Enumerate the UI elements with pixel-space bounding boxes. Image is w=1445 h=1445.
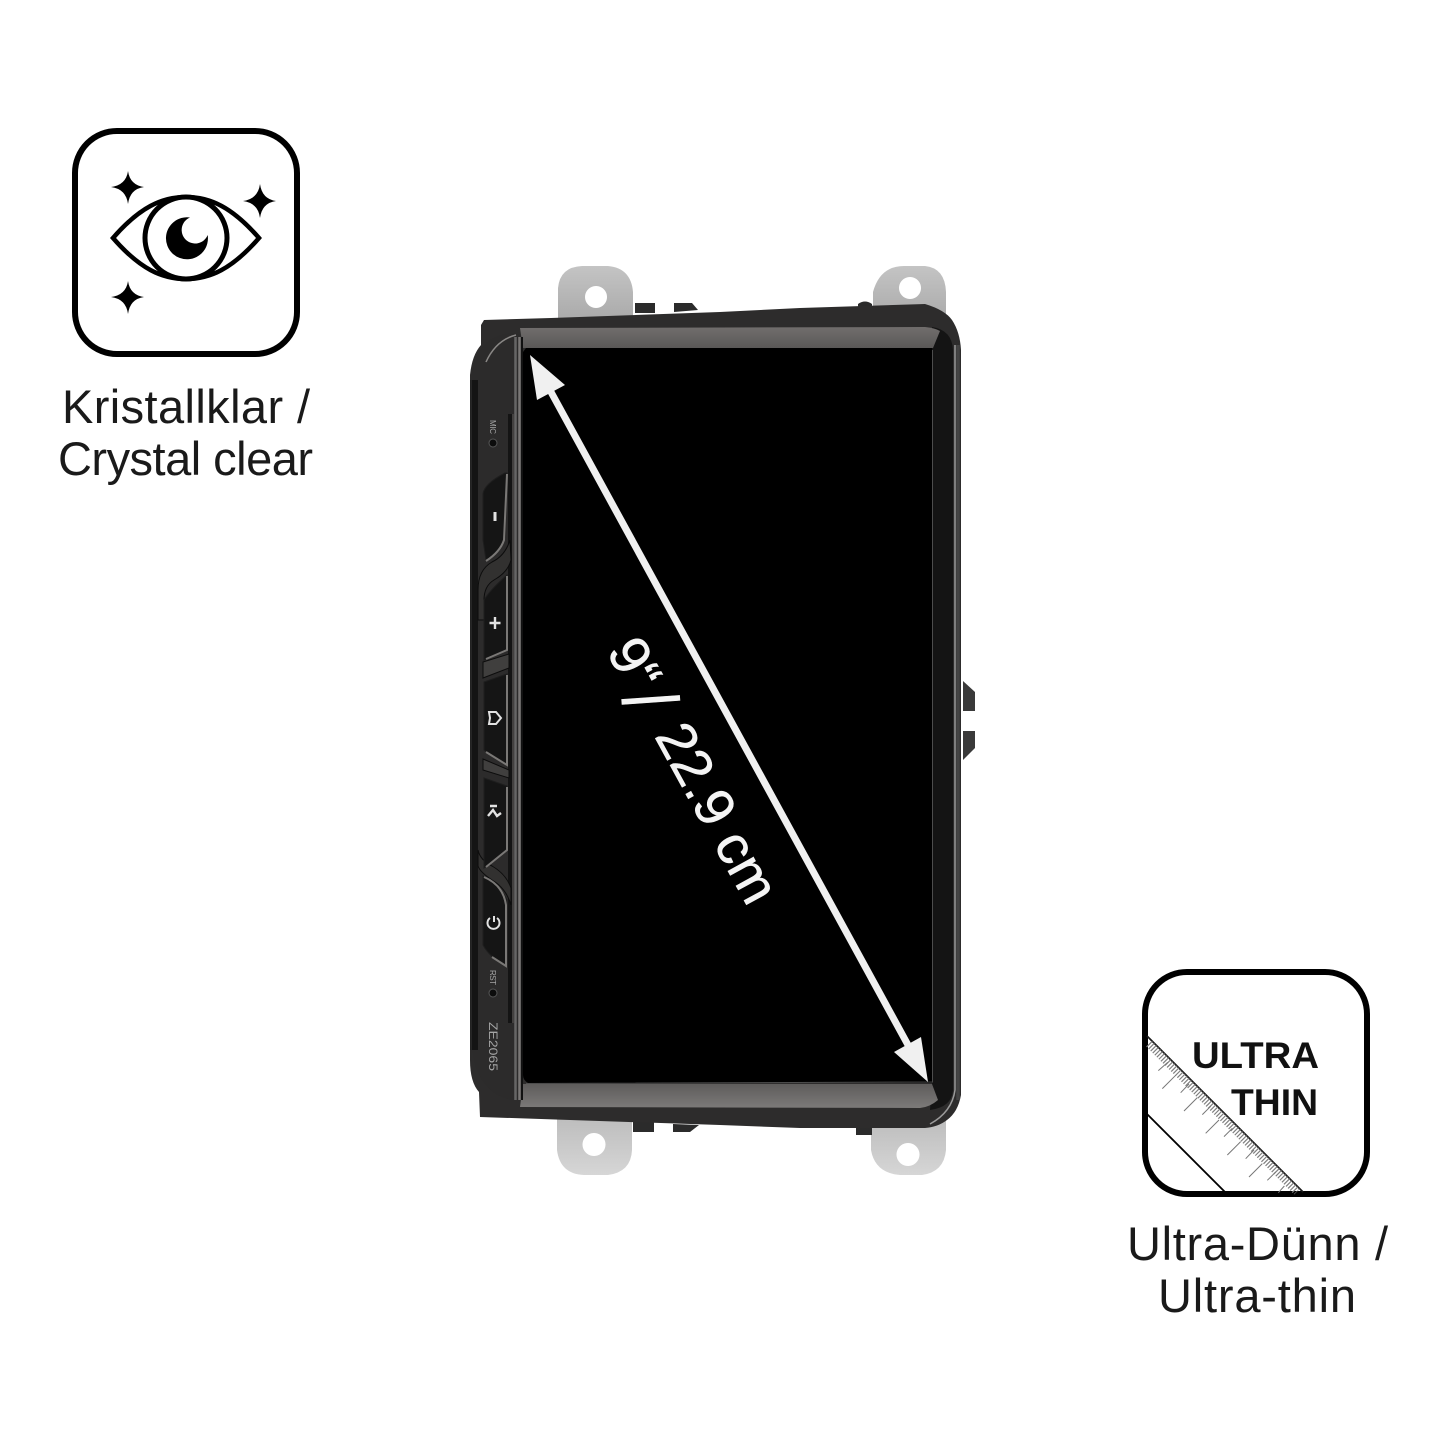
bottom gray band [520, 1084, 938, 1108]
diagonal size text [595, 627, 792, 914]
mounting tabs [557, 266, 946, 1175]
right dark bezel side [930, 327, 953, 1110]
diagonal size text: 9“ [595, 627, 675, 700]
button bevels [484, 474, 507, 966]
label: crystal clear: Crystal clear [58, 432, 313, 485]
ultra thin wordmark [1192, 1035, 1319, 1123]
strip printed labels: ZE2065 [486, 1022, 500, 1071]
housing [470, 304, 961, 1128]
right edge highlight [930, 345, 955, 1124]
diagonal size text: | [620, 689, 690, 710]
device: car radio display unit [470, 266, 975, 1175]
label: ultra thin [1127, 1217, 1389, 1322]
strip printed labels: MIC [488, 420, 497, 434]
label: crystal clear [58, 380, 313, 485]
buttons [483, 473, 507, 966]
screen edge [526, 350, 932, 1084]
strip printed labels [486, 420, 500, 1071]
mic and reset holes [489, 439, 497, 997]
icon: crystal clear eye [75, 131, 297, 354]
strip highlights [471, 335, 522, 1100]
strip printed labels: RST [488, 970, 497, 985]
screen [523, 348, 932, 1083]
clips on housing [633, 302, 975, 1135]
left control strip [472, 333, 521, 1100]
arrow: screen diagonal [530, 355, 928, 1082]
button icons [488, 512, 501, 929]
ruler [1147, 1036, 1303, 1193]
label: ultra thin: Ultra-Dünn / [1127, 1217, 1389, 1270]
label: ultra thin: Ultra-thin [1158, 1269, 1356, 1322]
ultra thin wordmark: ULTRA [1192, 1035, 1319, 1076]
label: crystal clear: Kristallklar / [62, 380, 311, 433]
diagonal size text: 22.9 cm [643, 712, 792, 914]
icon: ultra thin [1145, 972, 1367, 1194]
ultra thin wordmark: THIN [1231, 1082, 1318, 1123]
top gray band [520, 327, 940, 348]
curved separators between buttons [478, 540, 511, 905]
